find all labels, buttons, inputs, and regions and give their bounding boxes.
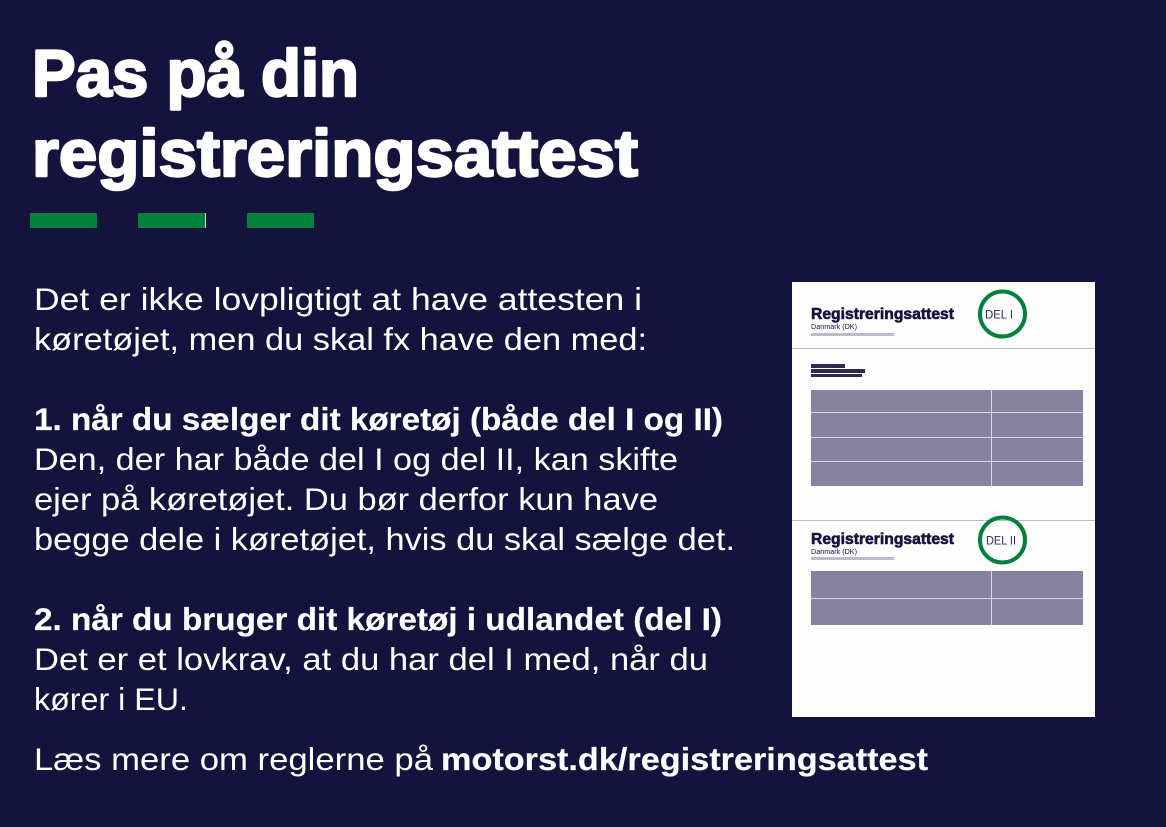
- title: registreringsattest: [32, 116, 638, 190]
- intro text: [34, 281, 647, 357]
- badge: DEL II: [980, 518, 1025, 562]
- badge: DEL I: [980, 292, 1025, 336]
- table: part I: [811, 390, 1083, 486]
- certificate part II header: Registreringsattest: [811, 531, 954, 548]
- footer link text: motorst.dk/registreringsattest: [441, 741, 929, 777]
- point 2: 2. når du bruger dit køretøj i udlandet (del I): [34, 601, 722, 637]
- footer link text: [34, 741, 929, 777]
- certificate part I header: Danmark (DK): [811, 324, 857, 331]
- certificate part II header: Danmark (DK): [811, 549, 857, 556]
- panel: registration certificate document: [792, 282, 1095, 717]
- title: [32, 36, 638, 190]
- badge: DEL II: DEL II: [986, 534, 1016, 548]
- point 2: [34, 601, 722, 717]
- green dashes: [30, 213, 314, 228]
- point 2: kører i EU.: [34, 681, 188, 717]
- table: part II: [811, 571, 1083, 625]
- point 1: begge dele i køretøjet, hvis du skal sælge det.: [34, 521, 735, 557]
- point 1: ejer på køretøjet. Du bør derfor kun have: [34, 481, 658, 517]
- intro text: Det er ikke lovpligtigt at have attesten i: [34, 281, 642, 317]
- point 1: 1. når du sælger dit køretøj (både del I og II): [34, 401, 723, 437]
- point 2: Det er et lovkrav, at du har del I med, når du: [34, 641, 708, 677]
- title: Pas på din: [32, 36, 359, 110]
- intro text: køretøjet, men du skal fx have den med:: [34, 321, 647, 357]
- certificate part II header: [811, 531, 954, 560]
- point 1: Den, der har både del I og del II, kan skifte: [34, 441, 678, 477]
- point 1: [34, 401, 735, 557]
- badge: DEL I: DEL I: [985, 308, 1013, 322]
- certificate part I header: [811, 306, 954, 336]
- footer link text: Læs mere om reglerne på: [34, 741, 434, 777]
- certificate part I header: Registreringsattest: [811, 306, 954, 323]
- redacted text lines: [811, 364, 865, 377]
